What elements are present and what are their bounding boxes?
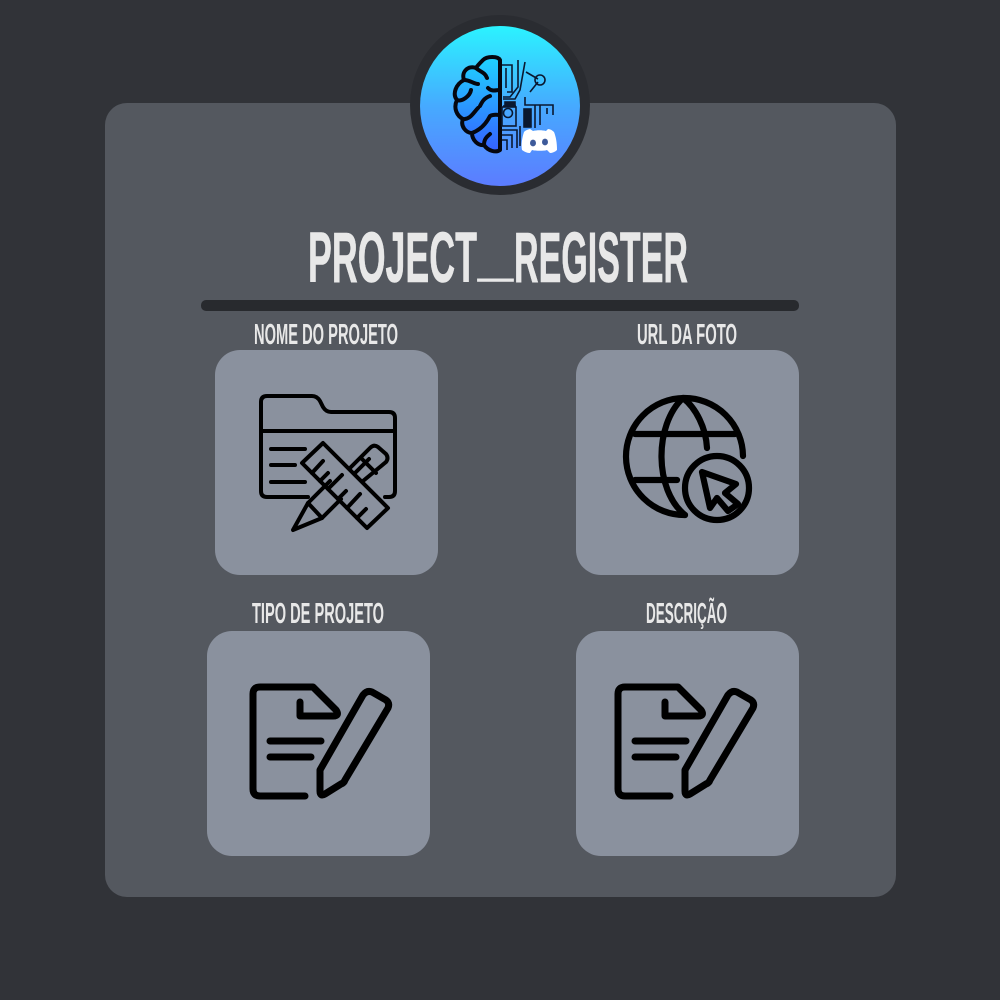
icon: brain [455, 57, 500, 151]
title divider [201, 300, 799, 311]
icon: document with pencil, type [253, 687, 389, 796]
icon: circuit half [502, 60, 553, 150]
icon: document with pencil, description [618, 687, 754, 796]
panel: description card [576, 631, 799, 856]
icon: folder with ruler and pencil [261, 396, 395, 530]
icon: discord [522, 129, 557, 153]
title: PROJECT [308, 218, 477, 298]
text: DESCRIÇÃO [646, 596, 727, 630]
panel: project name card [215, 350, 438, 575]
icon: globe with cursor [626, 398, 749, 520]
logo badge [410, 15, 590, 195]
title: _ [477, 209, 514, 289]
label: url da foto: URL DA FOTO [637, 319, 737, 351]
text: REGISTER [514, 218, 688, 298]
panel: main card [105, 103, 896, 897]
panel: photo url card [576, 350, 799, 575]
panel: project type card [207, 631, 430, 856]
label: nome do projeto: NOME DO PROJETO [254, 319, 398, 351]
label: tipo de projeto: TIPO DE PROJETO [252, 598, 384, 630]
